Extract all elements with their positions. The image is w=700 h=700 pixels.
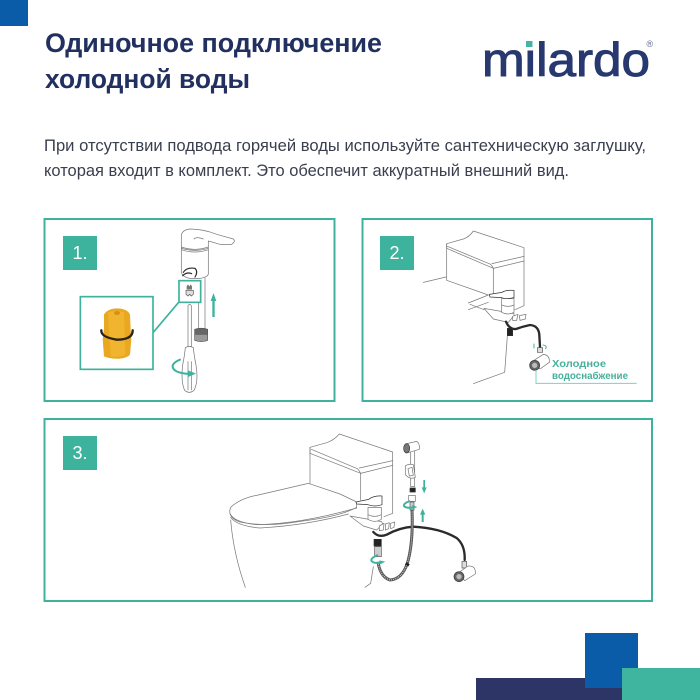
label: cold water supply bbox=[552, 359, 628, 382]
logo: milardo: ® bbox=[646, 39, 654, 49]
bowl bbox=[231, 520, 373, 587]
badge 1: 1. bbox=[72, 243, 88, 263]
toilet, faucet, hoses and shower illustration bbox=[230, 434, 475, 587]
logo: milardo: milardo bbox=[482, 33, 650, 86]
connector line bbox=[153, 302, 179, 332]
up arrow bbox=[211, 293, 216, 317]
cold hose bbox=[373, 527, 465, 560]
faucet illustration with screwdriver bbox=[80, 229, 234, 392]
panel: step 3 bbox=[44, 419, 652, 601]
tank bbox=[310, 434, 393, 473]
toilet tank and faucet illustration bbox=[423, 231, 637, 384]
rotate arrow bbox=[173, 360, 189, 374]
intro text bbox=[44, 136, 646, 180]
panel: step 2 bbox=[362, 219, 652, 401]
decorative blocks bottom right bbox=[476, 633, 700, 700]
angle valve bbox=[537, 348, 543, 352]
connector bbox=[374, 539, 381, 546]
teal arrows bbox=[371, 480, 427, 564]
seat bbox=[230, 483, 357, 525]
angle valve bbox=[462, 561, 467, 568]
badge 2 bbox=[380, 236, 414, 270]
badge 1 bbox=[63, 236, 97, 270]
title: холодной воды bbox=[45, 64, 250, 94]
panel: step 1 bbox=[44, 219, 334, 401]
leader line bbox=[536, 370, 637, 383]
intro text: которая входит в комплект. Это обеспечит аккуратный внешний вид. bbox=[44, 161, 569, 180]
faucet bbox=[350, 516, 383, 530]
label: cold water supply: Холодное bbox=[552, 359, 606, 370]
corner square top left bbox=[0, 0, 28, 26]
braided hose bbox=[378, 510, 412, 580]
badge 3: 3. bbox=[72, 443, 88, 463]
small detail box bbox=[179, 281, 201, 302]
inset: yellow plug bbox=[80, 297, 153, 369]
bidet shower bbox=[411, 450, 415, 487]
title: Одиночное подключение bbox=[45, 28, 382, 58]
label: cold water supply: водоснабжение bbox=[552, 370, 628, 382]
intro text: При отсутствии подвода горячей воды используйте сантехническую заглушку, bbox=[44, 136, 646, 155]
title bbox=[45, 28, 382, 94]
badge 3 bbox=[63, 436, 97, 470]
badge 2: 2. bbox=[389, 243, 405, 263]
hose bbox=[506, 322, 540, 347]
